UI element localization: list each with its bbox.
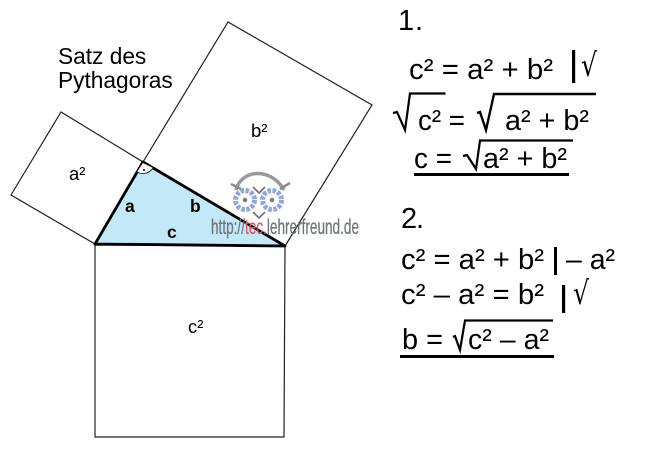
- equation line 1: [401, 244, 615, 276]
- result equation 2: b =: [402, 324, 443, 356]
- square a²: [11, 112, 143, 244]
- watermark url: http://tec.lehrerfreund.de: [211, 216, 359, 239]
- result equation 2: c² – a²: [468, 324, 549, 356]
- result equation 1: [414, 140, 573, 176]
- title: Pythagoras: [58, 67, 173, 93]
- square c²: [95, 245, 285, 437]
- square a²: a²: [69, 163, 85, 184]
- derivation 1: [393, 5, 597, 176]
- side labels: [125, 196, 201, 242]
- side labels: c: [167, 222, 177, 242]
- watermark owl icon: [231, 174, 290, 218]
- equation line 2: c² – a² = b²: [401, 279, 544, 311]
- heading 1: 1.: [398, 5, 423, 37]
- derivation 2: [400, 203, 615, 358]
- square c²: c²: [188, 316, 203, 337]
- square b²: [143, 22, 372, 246]
- root operation 1: [572, 46, 597, 84]
- root operation 1: √: [581, 46, 597, 84]
- title: Satz des: [58, 43, 146, 69]
- side labels: a: [125, 196, 135, 216]
- result equation 1: a² + b²: [483, 143, 567, 175]
- equation line 1: c² = a² + b²: [401, 244, 544, 276]
- equation line 1: – a²: [566, 244, 615, 276]
- right triangle: [95, 162, 285, 246]
- result equation 1: c =: [414, 143, 452, 175]
- equation line 2: [401, 274, 589, 313]
- equation line 2: c² =: [418, 105, 465, 137]
- result equation 2: [400, 320, 554, 358]
- heading 2: 2.: [401, 203, 424, 235]
- right angle mark: [137, 163, 153, 174]
- equation line 1: c² = a² + b²: [409, 54, 553, 86]
- square b²: b²: [251, 120, 267, 141]
- equation line 2: [393, 94, 596, 137]
- side labels: b: [190, 196, 201, 216]
- equation line 2: √: [573, 274, 589, 312]
- equation line 2: a² + b²: [505, 105, 589, 137]
